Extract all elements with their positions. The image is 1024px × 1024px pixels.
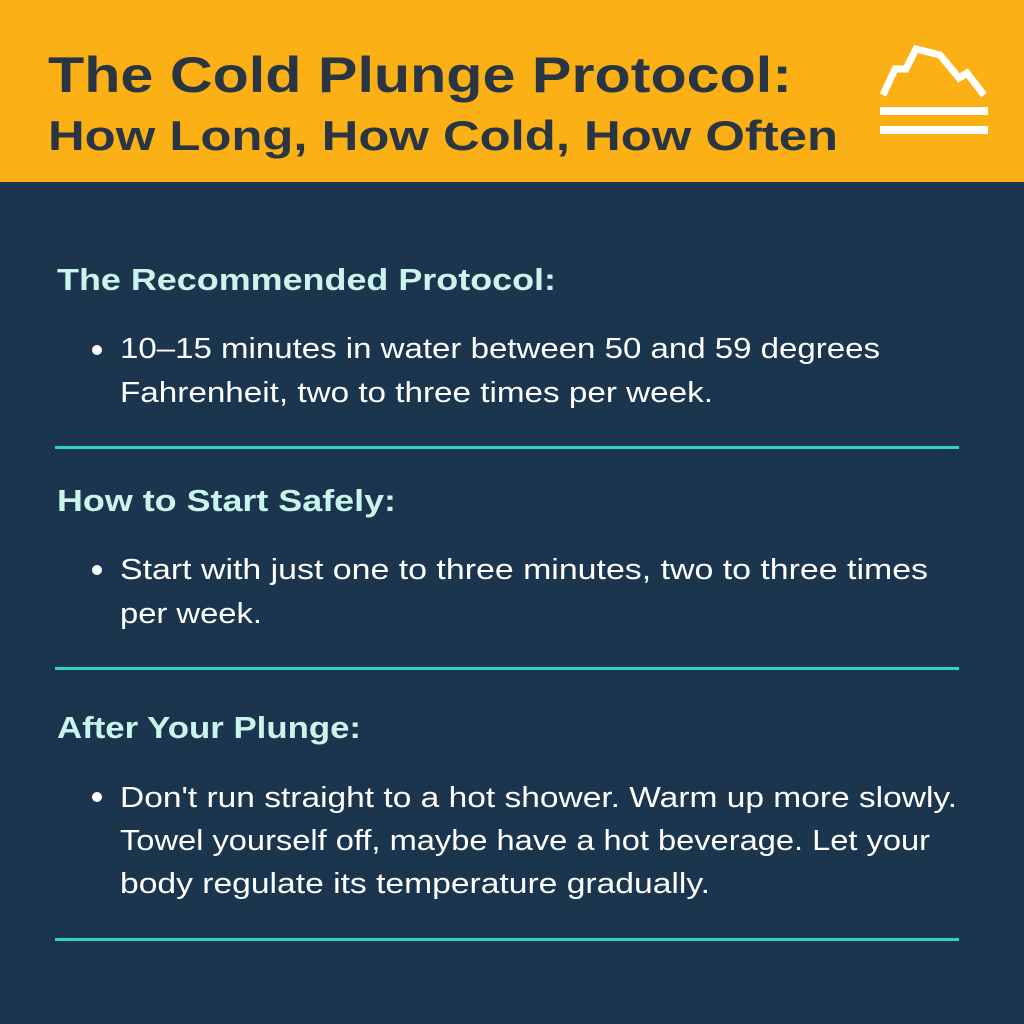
bullet text [92, 554, 928, 630]
bullet text: Fahrenheit, two to three times per week. [120, 377, 713, 409]
bullet text: 10–15 minutes in water between 50 and 59 degrees [120, 333, 880, 365]
title: The Cold Plunge Protocol: [48, 47, 792, 103]
title: How Long, How Cold, How Often [48, 112, 838, 159]
section: recommended protocol [57, 262, 880, 409]
header banner [0, 0, 1024, 182]
bullet text: body regulate its temperature gradually. [120, 868, 710, 900]
icon: mountain logo [880, 49, 988, 134]
bullet text: Start with just one to three minutes, two to three times [120, 554, 928, 586]
bullet text: per week. [120, 598, 262, 630]
bullet text: Don't run straight to a hot shower. Warm up more slowly. [120, 782, 957, 814]
section: after plunge [57, 710, 957, 900]
section: start safely [57, 483, 928, 630]
heading: How to Start Safely: [57, 483, 396, 518]
title [48, 47, 838, 159]
bullet text: Towel yourself off, maybe have a hot beverage. Let your [120, 825, 930, 857]
bullet text [92, 333, 880, 409]
heading: The Recommended Protocol: [57, 262, 556, 297]
heading: After Your Plunge: [57, 710, 361, 745]
bullet text [92, 782, 957, 900]
